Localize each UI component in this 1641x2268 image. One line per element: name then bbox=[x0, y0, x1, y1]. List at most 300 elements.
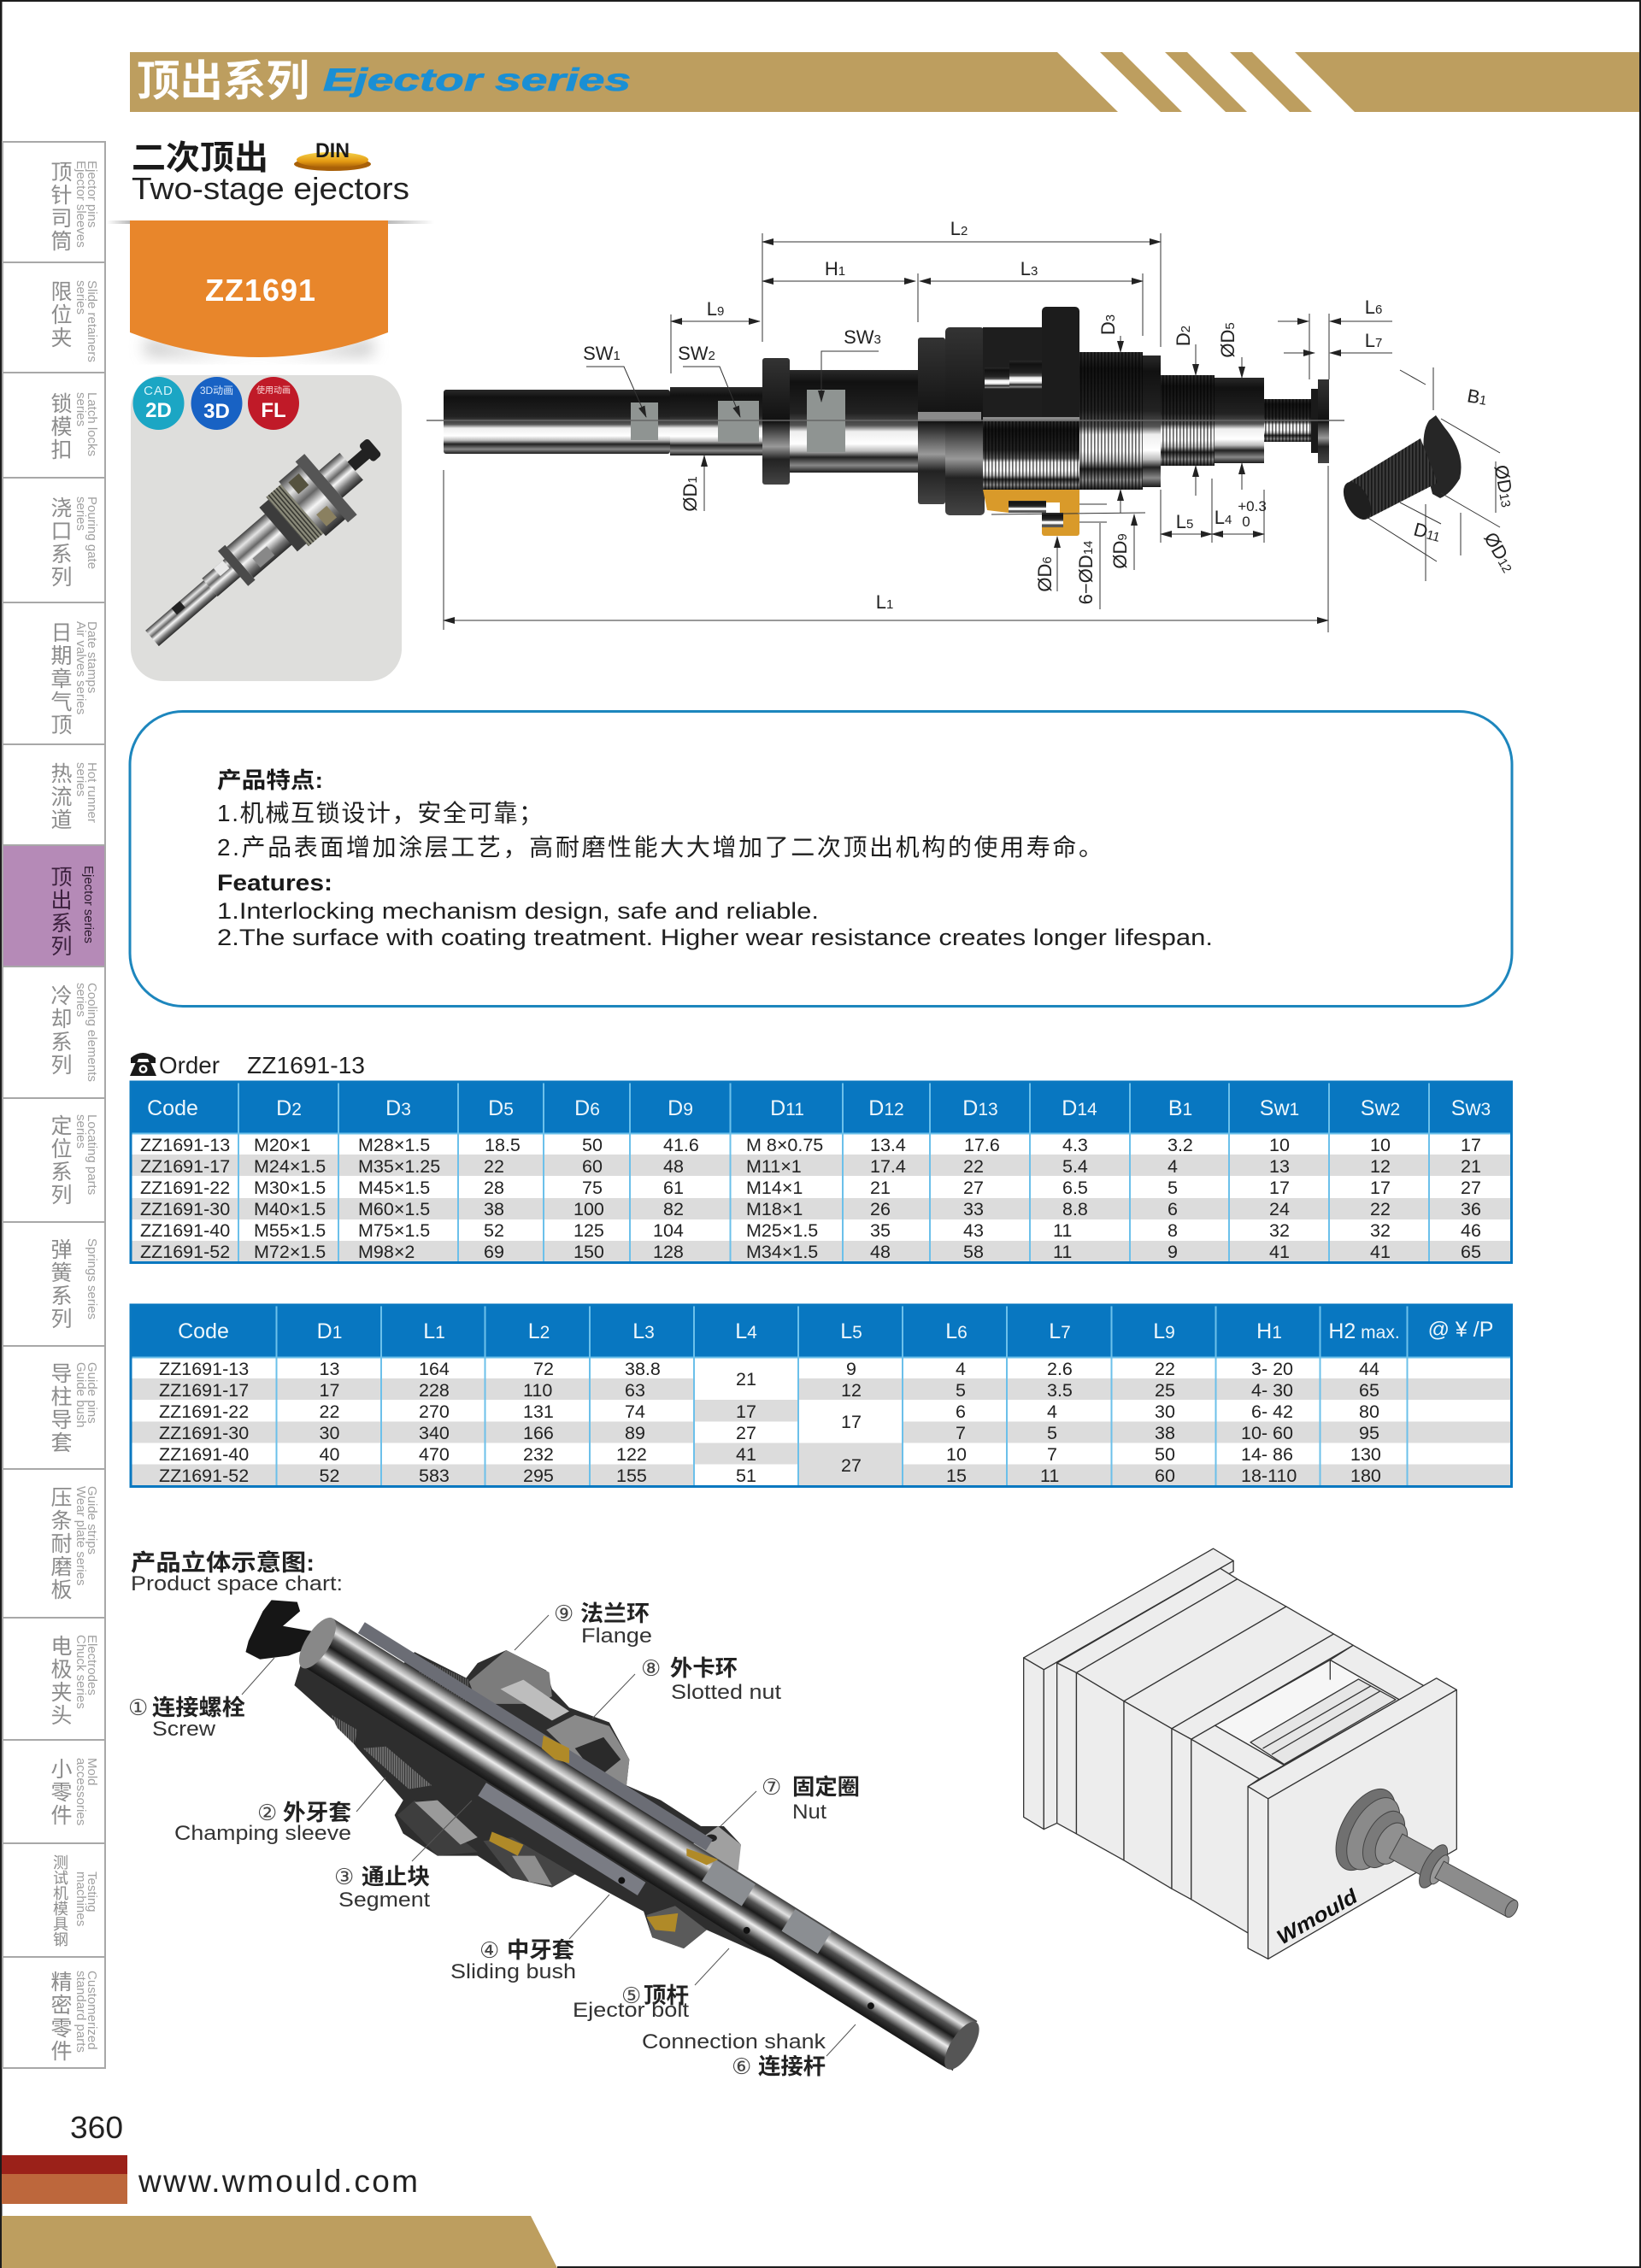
table 1 rows: 4 bbox=[1168, 1156, 1178, 1177]
table 1 rows: 32 bbox=[1370, 1220, 1391, 1241]
table 1 rows: M35×1.25 bbox=[358, 1156, 440, 1177]
table 1 header: D14 bbox=[1062, 1096, 1097, 1120]
callout 1 screw: ① bbox=[128, 1695, 148, 1721]
part callouts bbox=[128, 1601, 860, 2080]
table 2 header: L4 bbox=[735, 1319, 757, 1343]
table 2 rows: 95 bbox=[1359, 1423, 1379, 1443]
table 1 rows: 75 bbox=[582, 1178, 603, 1198]
table 2 rows: 63 bbox=[625, 1380, 645, 1401]
table 2 header: L6 bbox=[945, 1319, 968, 1343]
tab: Locating parts: series bbox=[74, 1114, 88, 1149]
table 2 header: L3 bbox=[632, 1319, 655, 1343]
table 1 rows: 17 bbox=[1461, 1135, 1481, 1155]
table 2 rows: ZZ1691-17 bbox=[159, 1380, 249, 1401]
table 1 rows: M14×1 bbox=[746, 1178, 803, 1198]
product photo panel bbox=[126, 375, 402, 681]
website url: www.wmould.com bbox=[138, 2164, 418, 2199]
gold cross-section blocks bbox=[983, 490, 1079, 536]
callout 4 sliding bush: ④ bbox=[479, 1938, 499, 1964]
table 2 rows: 41 bbox=[736, 1444, 756, 1465]
table 2 rows: 44 bbox=[1359, 1359, 1379, 1379]
table 2 rows: 6 bbox=[956, 1401, 966, 1422]
tab: Latch locks: 锁模扣 bbox=[48, 392, 72, 461]
dimension labels: L2 bbox=[950, 218, 968, 239]
table 1 rows: 41.6 bbox=[663, 1135, 699, 1155]
table 2 rows: 38 bbox=[1155, 1423, 1175, 1443]
tab: Slide retainers: Slide retainers bbox=[85, 280, 99, 362]
tab: Ejector series active: Ejector series bbox=[81, 866, 96, 943]
table 2 rows: 50 bbox=[1155, 1444, 1175, 1465]
features heading Chinese: 产品特点: bbox=[217, 767, 323, 793]
tab: Guide strips bbox=[48, 1486, 99, 1601]
table 1 rows: 48 bbox=[663, 1156, 684, 1177]
table 1 rows: 28 bbox=[484, 1178, 504, 1198]
table 2 header: L1 bbox=[423, 1319, 445, 1343]
table 1 rows: M24×1.5 bbox=[254, 1156, 326, 1177]
callout 1 screw: Screw bbox=[152, 1718, 216, 1741]
tab: Ejector series active bbox=[48, 866, 96, 958]
header title English: Ejector series bbox=[323, 62, 631, 97]
dimension labels: SW1 bbox=[583, 343, 621, 364]
table 2 rows: 30 bbox=[1155, 1401, 1175, 1422]
table 2 rows: 270 bbox=[419, 1401, 450, 1422]
table 1 rows: 4.3 bbox=[1062, 1135, 1088, 1155]
screw detail view: B1 bbox=[1466, 385, 1489, 409]
callout 3 segment: Segment bbox=[338, 1889, 430, 1912]
slotted nut bbox=[546, 1715, 629, 1785]
dimension labels: L3 bbox=[1020, 258, 1038, 279]
table 1 rows: 61 bbox=[663, 1178, 684, 1198]
tab: Hot runner: Hot runner bbox=[85, 762, 99, 823]
table 2 rows: 22 bbox=[1155, 1359, 1175, 1379]
page number: 360 bbox=[70, 2110, 123, 2145]
threaded zones bbox=[351, 1642, 400, 1685]
table 1 rows: 5 bbox=[1168, 1178, 1178, 1198]
lower ring bbox=[484, 1837, 575, 1888]
dimension labels: ØD9 bbox=[1109, 533, 1131, 569]
tab: Guide pins: Guide pins bbox=[85, 1362, 99, 1424]
table 1 rows: 22 bbox=[484, 1156, 504, 1177]
sidebar tabs bbox=[3, 142, 105, 2068]
small lower flange bbox=[646, 1906, 707, 1948]
order line: Order bbox=[159, 1052, 220, 1078]
features list Chinese: 2.产品表面增加涂层工艺，高耐磨性能大大增加了二次顶出机构的使用寿命。 bbox=[217, 834, 1103, 861]
dimension labels: +0.3 bbox=[1238, 498, 1267, 514]
table 1 header: D6 bbox=[574, 1096, 600, 1120]
table 1 rows: 82 bbox=[663, 1199, 684, 1219]
table 1 rows: 41 bbox=[1370, 1242, 1391, 1262]
dimension lines bbox=[444, 233, 1392, 632]
callout 6 connection shank: Connection shank bbox=[642, 2030, 826, 2054]
table 1 rows: 18.5 bbox=[485, 1135, 521, 1155]
table 1 rows: 8 bbox=[1168, 1220, 1178, 1241]
tab: Guide strips: Guide strips bbox=[85, 1486, 99, 1554]
tab: Slide retainers: 限位夹 bbox=[48, 280, 72, 350]
model code: ZZ1691 bbox=[205, 273, 315, 308]
mould assembly diagram bbox=[1024, 1548, 1538, 1959]
dimension labels: H1 bbox=[825, 258, 845, 279]
table 2 rows: 166 bbox=[523, 1423, 554, 1443]
tab: Pouring gate bbox=[48, 496, 99, 589]
table 1 rows: 22 bbox=[963, 1156, 984, 1177]
callout 1 screw bbox=[128, 1695, 245, 1741]
dimension labels: L6 bbox=[1365, 297, 1382, 318]
callout 2 champing sleeve: 外牙套 bbox=[283, 1800, 351, 1825]
table 2 rows: ZZ1691-22 bbox=[159, 1401, 249, 1422]
table 2 rows: 80 bbox=[1359, 1401, 1379, 1422]
dimension labels: SW2 bbox=[678, 343, 715, 364]
table 2 rows: 4 bbox=[956, 1359, 966, 1379]
screw detail view bbox=[1338, 367, 1520, 581]
table 2 header: L5 bbox=[840, 1319, 862, 1343]
footer gold band bbox=[2, 2216, 557, 2268]
flange ring bbox=[469, 1650, 552, 1704]
DIN badge bbox=[294, 139, 371, 171]
callout 1 screw: 连接螺栓 bbox=[152, 1695, 245, 1720]
product photo: assembled ejector bbox=[126, 416, 401, 669]
orange model tab bbox=[107, 220, 434, 357]
table 1 rows: 46 bbox=[1461, 1220, 1481, 1241]
tab: Ejector pins bbox=[48, 161, 99, 253]
product space chart heading: Product space chart: bbox=[131, 1572, 343, 1595]
tab: Ejector pins: Ejector sleeves bbox=[74, 161, 88, 248]
tab: Testing machines: 测试机模具钢 bbox=[51, 1854, 68, 1947]
table 2 header: @ ¥ /P bbox=[1428, 1318, 1493, 1342]
table 2 rows: 21 bbox=[736, 1369, 756, 1390]
dimension labels: D3 bbox=[1097, 314, 1119, 335]
table 1 rows: M98×2 bbox=[358, 1242, 415, 1262]
table 1 rows: 10 bbox=[1269, 1135, 1290, 1155]
table 2 rows: ZZ1691-30 bbox=[159, 1423, 249, 1443]
table 2 header: L2 bbox=[528, 1319, 550, 1343]
table 2 rows: 52 bbox=[320, 1466, 339, 1486]
table 2 rows: 130 bbox=[1350, 1444, 1381, 1465]
dimension labels: 6−ØD14 bbox=[1075, 541, 1097, 604]
callout 9 flange bbox=[554, 1601, 652, 1648]
table 2 rows: 51 bbox=[736, 1466, 756, 1486]
tab: Springs series bbox=[48, 1238, 99, 1331]
features list English bbox=[217, 898, 1213, 950]
cutaway product illustration bbox=[245, 1600, 994, 2089]
table 1 header: D12 bbox=[868, 1096, 904, 1120]
features list Chinese: 1.机械互锁设计，安全可靠； bbox=[217, 800, 543, 826]
tab: Slide retainers: series bbox=[74, 280, 88, 314]
tab: Mold accessories: 小零件 bbox=[48, 1758, 72, 1827]
table 1 rows: ZZ1691-30 bbox=[140, 1199, 230, 1219]
table 2 rows: 22 bbox=[320, 1401, 339, 1422]
table 1 rows: M40×1.5 bbox=[254, 1199, 326, 1219]
table 1 rows: 33 bbox=[963, 1199, 984, 1219]
callout 9 flange: Flange bbox=[581, 1625, 652, 1648]
table 2 rows: 14- 86 bbox=[1241, 1444, 1293, 1465]
table 2 header: L9 bbox=[1153, 1319, 1175, 1343]
table 2 rows: 9 bbox=[846, 1359, 856, 1379]
table 1 rows: 26 bbox=[870, 1199, 891, 1219]
tab: Testing machines: Testing bbox=[85, 1871, 99, 1913]
dimension labels: ØD1 bbox=[679, 476, 701, 512]
table 1 rows: ZZ1691-17 bbox=[140, 1156, 230, 1177]
tab: Ejector series active: 顶出系列 bbox=[48, 866, 72, 958]
main shaft bbox=[284, 1601, 994, 2089]
table 1 rows: M72×1.5 bbox=[254, 1242, 326, 1262]
screw detail view: D11 bbox=[1412, 519, 1443, 546]
callout 7 nut bbox=[762, 1774, 860, 1824]
table 2 header bbox=[178, 1318, 1493, 1343]
table 2 rows: ZZ1691-52 bbox=[159, 1466, 249, 1486]
callout 3 segment: 通止块 bbox=[362, 1864, 430, 1889]
table 1 rows: 6 bbox=[1168, 1199, 1178, 1219]
product space chart heading bbox=[131, 1550, 343, 1595]
dimension labels: SW3 bbox=[844, 326, 881, 348]
table 2 rows: 30 bbox=[320, 1423, 339, 1443]
table 2 rows: 180 bbox=[1350, 1466, 1381, 1486]
table 1 rows: M34×1.5 bbox=[746, 1242, 818, 1262]
table 1 rows: 36 bbox=[1461, 1199, 1481, 1219]
table 1 rows: 22 bbox=[1370, 1199, 1391, 1219]
table 2 rows: 17 bbox=[736, 1401, 756, 1422]
table 1 header: D11 bbox=[770, 1096, 804, 1120]
table 1 header: Code bbox=[147, 1096, 198, 1120]
dimension labels: ØD6 bbox=[1034, 556, 1056, 592]
table 1 header: D13 bbox=[962, 1096, 998, 1120]
tab: Cooling elements: series bbox=[74, 983, 88, 1017]
table 1 rows: M55×1.5 bbox=[254, 1220, 326, 1241]
table 2 rows: 65 bbox=[1359, 1380, 1379, 1401]
callout 9 flange: ⑨ bbox=[554, 1601, 573, 1627]
callout 4 sliding bush: 中牙套 bbox=[507, 1937, 574, 1963]
table 2 rows: 295 bbox=[523, 1466, 554, 1486]
table 1 header: D9 bbox=[668, 1096, 693, 1120]
table 1 rows: 17.6 bbox=[964, 1135, 1000, 1155]
table 1 header bbox=[147, 1096, 1491, 1120]
table 2 rows: 122 bbox=[616, 1444, 647, 1465]
table 1 rows: 3.2 bbox=[1168, 1135, 1193, 1155]
table 2: length dimensions and price bbox=[130, 1304, 1512, 1487]
table 1 rows: 69 bbox=[484, 1242, 504, 1262]
table 1 rows: 38 bbox=[484, 1199, 504, 1219]
table 1 rows: M28×1.5 bbox=[358, 1135, 430, 1155]
order line bbox=[130, 1052, 365, 1078]
table 1 rows: 100 bbox=[573, 1199, 604, 1219]
dimension labels: L7 bbox=[1365, 330, 1382, 351]
screw detail view: ØD13 bbox=[1491, 463, 1519, 508]
callout 3 segment bbox=[334, 1864, 430, 1912]
features list English: 2.The surface with coating treatment. Higher wear resistance creates longer lifespan. bbox=[217, 925, 1213, 950]
callout 8 slotted nut: 外卡环 bbox=[670, 1655, 738, 1681]
table 2 rows: 40 bbox=[320, 1444, 339, 1465]
table 1 rows: 65 bbox=[1461, 1242, 1481, 1262]
table 1 rows: 32 bbox=[1269, 1220, 1290, 1241]
table 2 header: H1 bbox=[1256, 1319, 1282, 1343]
table 2 rows: 6- 42 bbox=[1251, 1401, 1293, 1422]
table 1 rows: 5.4 bbox=[1062, 1156, 1088, 1177]
nut ring bbox=[686, 1826, 741, 1871]
callout 9 flange: 法兰环 bbox=[580, 1601, 650, 1626]
table 2 rows: 7 bbox=[956, 1423, 966, 1443]
table 2 rows: 18-110 bbox=[1241, 1466, 1297, 1486]
features list Chinese bbox=[217, 800, 1103, 861]
table 1 rows: ZZ1691-13 bbox=[140, 1135, 230, 1155]
callout 2 champing sleeve: ② bbox=[257, 1801, 277, 1826]
table 2 rows: 17 bbox=[841, 1412, 862, 1432]
dimension labels: L1 bbox=[876, 591, 893, 613]
table 2 rows: 38.8 bbox=[625, 1359, 661, 1379]
table 2 rows: 72 bbox=[533, 1359, 554, 1379]
tab: Mold accessories: Mold bbox=[85, 1758, 99, 1786]
tab: Guide strips: Wear plate series bbox=[74, 1486, 88, 1585]
table 1 rows: M60×1.5 bbox=[358, 1199, 430, 1219]
table 1 rows: M20×1 bbox=[254, 1135, 310, 1155]
table 2 rows: 17 bbox=[320, 1380, 339, 1401]
table 1 rows: 41 bbox=[1269, 1242, 1290, 1262]
footer colour blocks bbox=[2, 2155, 127, 2204]
tab: Springs series: Springs series bbox=[85, 1238, 99, 1319]
table 1 rows: 11 bbox=[1053, 1220, 1072, 1241]
tab: Electrodes: Chuck series bbox=[74, 1635, 88, 1709]
table 1 rows: 125 bbox=[573, 1220, 604, 1241]
table 1 rows: M75×1.5 bbox=[358, 1220, 430, 1241]
callout 8 slotted nut: Slotted nut bbox=[671, 1681, 781, 1704]
table 1 header: D2 bbox=[276, 1096, 302, 1120]
tab: Springs series: 弹簧系列 bbox=[48, 1238, 72, 1331]
tab: Locating parts: Locating parts bbox=[85, 1114, 99, 1195]
table 1: thread and diameter dimensions bbox=[130, 1081, 1512, 1263]
table 1 rows: 60 bbox=[582, 1156, 603, 1177]
table 1 rows: M11×1 bbox=[746, 1156, 802, 1177]
callout 3 segment: ③ bbox=[334, 1865, 354, 1890]
table 1 rows: 13.4 bbox=[870, 1135, 906, 1155]
tab: Pouring gate: 浇口系列 bbox=[48, 496, 72, 589]
table 2 rows: 155 bbox=[616, 1466, 647, 1486]
table 1 header: B1 bbox=[1168, 1096, 1192, 1120]
callout 6 connection shank: 连接杆 bbox=[758, 2054, 826, 2079]
icon: FL badge: FL bbox=[261, 399, 286, 422]
table 2 rows: 4- 30 bbox=[1251, 1380, 1293, 1401]
tab: Cooling elements: Cooling elements bbox=[85, 983, 99, 1082]
tab: Guide strips: 压条耐磨板 bbox=[48, 1486, 72, 1601]
dimension labels: 0 bbox=[1242, 514, 1250, 530]
icon: 3D badge: 3D bbox=[203, 400, 230, 423]
table 1 rows: 12 bbox=[1370, 1156, 1391, 1177]
icon: telephone bbox=[130, 1053, 156, 1076]
tab: Mold accessories: accessories bbox=[74, 1758, 88, 1825]
table 1 rows: M30×1.5 bbox=[254, 1178, 326, 1198]
table 1 rows: 17.4 bbox=[870, 1156, 906, 1177]
tab: Guide pins: Guide bush bbox=[74, 1362, 88, 1428]
table 1 rows: 6.5 bbox=[1062, 1178, 1088, 1198]
tab: Mold accessories bbox=[48, 1758, 99, 1827]
shaft body bbox=[444, 307, 1329, 515]
table 1 rows: 150 bbox=[573, 1242, 604, 1262]
table 1 rows: 27 bbox=[963, 1178, 984, 1198]
tab: Customerized parts: standard parts bbox=[74, 1971, 88, 2053]
table 1 rows: ZZ1691-52 bbox=[140, 1242, 230, 1262]
table 1 rows: 58 bbox=[963, 1242, 984, 1262]
table 2 rows: 74 bbox=[625, 1401, 645, 1422]
table 2 rows: 340 bbox=[419, 1423, 450, 1443]
dimension labels bbox=[583, 218, 1382, 613]
tab: Electrodes bbox=[48, 1635, 99, 1727]
table 1 rows: M25×1.5 bbox=[746, 1220, 818, 1241]
tab: Testing machines: machines bbox=[74, 1871, 88, 1926]
table 2 rows: 5 bbox=[956, 1380, 966, 1401]
callout 8 slotted nut: ⑧ bbox=[641, 1656, 661, 1682]
icon: 3D badge bbox=[191, 377, 243, 430]
callout 7 nut: Nut bbox=[792, 1801, 826, 1824]
callout 2 champing sleeve: Champing sleeve bbox=[174, 1822, 351, 1845]
table 1 rows bbox=[140, 1135, 1481, 1262]
callout 8 slotted nut bbox=[641, 1655, 781, 1704]
gold thread notches bbox=[489, 1736, 718, 1932]
table 1 rows: 35 bbox=[870, 1220, 891, 1241]
table 1 rows: 128 bbox=[653, 1242, 684, 1262]
table 1 rows: M 8×0.75 bbox=[746, 1135, 823, 1155]
table 2 rows: 11 bbox=[1040, 1466, 1059, 1486]
centre line bbox=[426, 420, 1344, 421]
table 1 rows: 11 bbox=[1053, 1242, 1072, 1262]
tab: Pouring gate: series bbox=[74, 496, 88, 531]
table 1 header: D3 bbox=[385, 1096, 411, 1120]
dimension labels: L9 bbox=[707, 298, 724, 320]
table 1 rows: ZZ1691-40 bbox=[140, 1220, 230, 1241]
table 1 rows: 21 bbox=[870, 1178, 891, 1198]
table 2 rows: 2.6 bbox=[1047, 1359, 1073, 1379]
table 2 rows: 131 bbox=[523, 1401, 554, 1422]
table 2 rows: 13 bbox=[320, 1359, 339, 1379]
DIN badge: DIN bbox=[315, 139, 350, 162]
tab: Date stamps: 日期章气顶 bbox=[48, 621, 72, 737]
icon: CAD 2D badge: CAD bbox=[144, 384, 174, 398]
table 2 rows: 3.5 bbox=[1047, 1380, 1073, 1401]
table 1 rows: 17 bbox=[1269, 1178, 1290, 1198]
technical drawing: side view with dimensions bbox=[426, 218, 1520, 632]
table 2 rows: 232 bbox=[523, 1444, 554, 1465]
table 2 header: Code bbox=[178, 1319, 229, 1343]
tab: Guide pins: 导柱导套 bbox=[48, 1362, 72, 1454]
dimension labels: D2 bbox=[1173, 326, 1194, 346]
section heading English: Two-stage ejectors bbox=[132, 171, 409, 206]
table 1 rows: 21 bbox=[1461, 1156, 1481, 1177]
tab: Customerized parts: Customerized bbox=[85, 1971, 99, 2050]
table 1 header: D5 bbox=[488, 1096, 514, 1120]
features panel bbox=[130, 711, 1512, 1007]
dimension labels: L5 bbox=[1176, 511, 1193, 532]
screw head bbox=[245, 1600, 315, 1660]
tab: Ejector pins: Ejector pins bbox=[85, 161, 99, 227]
table 1 rows: 43 bbox=[963, 1220, 984, 1241]
table 2 rows: 470 bbox=[419, 1444, 450, 1465]
table 2 rows: 10 bbox=[946, 1444, 967, 1465]
table 1 header: Sw1 bbox=[1260, 1096, 1299, 1120]
table 2 rows: 27 bbox=[841, 1455, 862, 1476]
tab: Date stamps: Date stamps bbox=[85, 621, 99, 693]
table 1 header: Sw2 bbox=[1361, 1096, 1400, 1120]
wrench flats bbox=[631, 390, 845, 452]
callout 7 nut: 固定圈 bbox=[792, 1774, 860, 1800]
header title Chinese: 顶出系列 bbox=[137, 57, 309, 105]
tab: Hot runner: series bbox=[74, 762, 88, 796]
table 1 rows: 8.8 bbox=[1062, 1199, 1088, 1219]
callout 4 sliding bush bbox=[450, 1937, 576, 1983]
table 1 rows: M45×1.5 bbox=[358, 1178, 430, 1198]
callout 5 ejector bolt: ⑤ bbox=[621, 1983, 641, 2009]
table 2 rows: 5 bbox=[1047, 1423, 1057, 1443]
tab: Date stamps bbox=[48, 621, 99, 737]
tab: Customerized parts bbox=[48, 1971, 99, 2063]
table 1 rows: 52 bbox=[484, 1220, 504, 1241]
tab: Hot runner bbox=[48, 762, 99, 831]
tab: Slide retainers bbox=[48, 280, 99, 362]
